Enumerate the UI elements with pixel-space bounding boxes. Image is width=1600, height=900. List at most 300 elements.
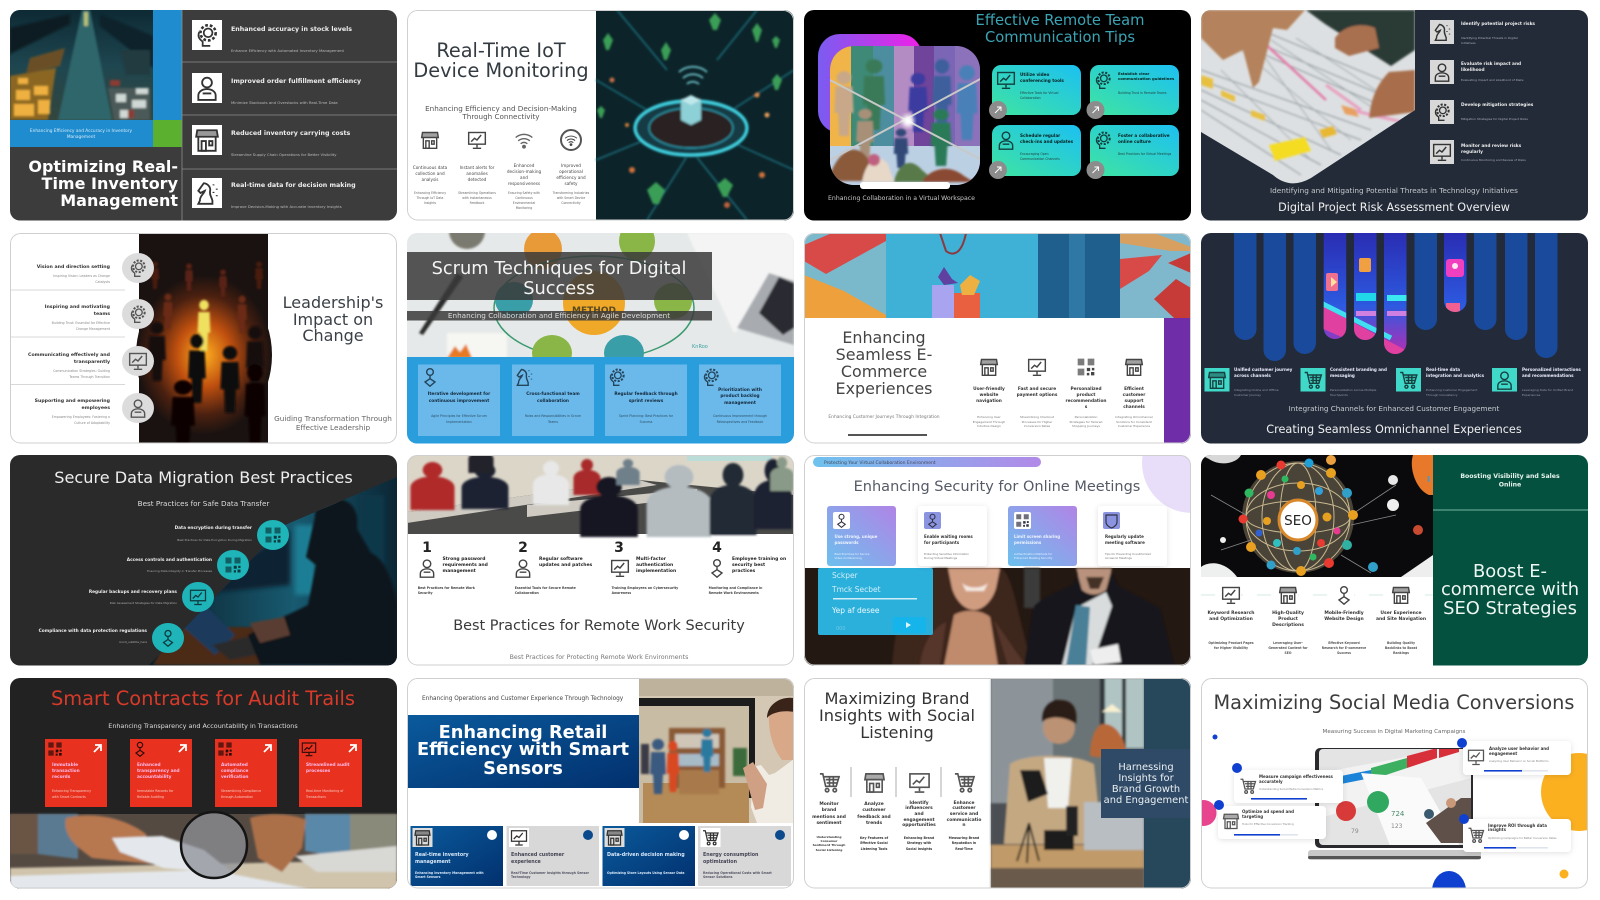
feature: support: Integrating Omnichannel — [1115, 415, 1153, 419]
panel: Maximizing Brand Insights with Social Listening — [804, 678, 1191, 889]
red card: audit: Transactions — [305, 795, 326, 799]
strategy: keywords: and Optimization — [1209, 616, 1253, 622]
title: Effective Remote Team — [976, 12, 1144, 29]
feature: support: customer — [1123, 392, 1146, 398]
metric card: ROI — [1459, 814, 1571, 852]
item: empowering: Supporting and empowering — [35, 398, 110, 404]
panel: Boost E-commerce with SEO Strategies — [1201, 453, 1588, 666]
caption: Enhancing Collaboration in a Virtual Workspace — [828, 195, 975, 202]
item: influencers: Identify — [909, 800, 929, 806]
subtitle: Through Connectivity — [461, 112, 540, 121]
tip: regular check-ins — [989, 125, 1081, 179]
feature: customer experience: Technology — [511, 875, 531, 879]
risk step: evaluate: Evaluate risk impact and — [1461, 61, 1521, 67]
metric card: ad spend: Tools for Effective Conversion Tracking — [1241, 822, 1294, 826]
callout box: Brand Growth — [1112, 784, 1180, 795]
item: analyze: trends — [866, 820, 882, 826]
feature: inventory: Smart Sensors — [415, 875, 441, 879]
strategy: mobile design: Research for E-commerce — [1322, 646, 1366, 650]
item: enhanced decision making — [507, 134, 541, 210]
metric card: user behavior — [1457, 738, 1571, 775]
item: operational safety: with Smart Device — [557, 196, 585, 200]
red card: compliance: Streamlining Compliance — [221, 789, 261, 793]
item: continuous data: Enhancing Efficiency — [414, 191, 446, 195]
feature: recommendations: product — [1077, 392, 1095, 398]
feature: support — [1115, 360, 1153, 428]
laptop with social metrics: 79 — [1351, 828, 1359, 835]
item: service: customer — [952, 805, 976, 811]
title: Real-Time IoT — [436, 39, 566, 62]
title: Communication Tips — [985, 29, 1135, 46]
red card: audit: Real-time Monitoring of — [306, 789, 344, 793]
metric card: user behavior: Analyze user behavior and — [1489, 746, 1549, 751]
benefit: stock accuracy — [192, 20, 352, 53]
feature: customer experience — [506, 826, 599, 886]
feature: customer experience: experience — [511, 859, 542, 865]
red card: audit: processes — [306, 768, 331, 774]
tip: screen sharing: permissions — [1014, 540, 1042, 545]
practice 1: requirements and — [442, 562, 488, 568]
feature: data-driven decisions: Optimizing Store Layouts Using Sensor Data — [607, 871, 684, 875]
item: instant alerts: Streamlining Operations — [458, 191, 496, 195]
tip: regular check-ins: Encouraging Open — [1020, 152, 1049, 156]
panel: Secure Data Migration Best Practices — [10, 455, 397, 666]
item: communicating — [28, 346, 154, 379]
practice 1: management — [442, 568, 477, 574]
strategy: descriptions: Descriptions — [1272, 622, 1304, 628]
metric card: campaign effectiveness: Measure campaign effectiveness — [1259, 774, 1334, 779]
item: vision: Inspiring Vision: Leaders as Change — [53, 274, 110, 278]
title: Scrum Techniques for Digital — [432, 258, 686, 279]
channel: unified journey: Unified customer journey — [1234, 367, 1293, 372]
channel: real-time data: integration and analytics — [1426, 373, 1485, 378]
metric card: campaign effectiveness — [1232, 763, 1343, 803]
tip: clear guidelines — [1086, 65, 1179, 119]
item: empowering: employees — [82, 405, 110, 411]
technique: iterative: Implementation — [446, 420, 472, 424]
feature: inventory: Real-time inventory — [415, 852, 469, 858]
strategy: keywords — [1207, 584, 1255, 650]
step: access controls — [127, 550, 249, 580]
channel: unified journey: Customer Journey — [1234, 393, 1261, 397]
strategy: navigation: User Experience — [1380, 610, 1422, 616]
title: Smart Contracts for Audit Trails — [51, 687, 355, 710]
item: analyze: Analyze — [864, 801, 884, 807]
title: Boost E- — [1473, 561, 1547, 582]
blue login panel: Yep af desee — [831, 606, 880, 615]
strategy: descriptions: High-Quality — [1272, 610, 1304, 616]
risk step: monitor: Monitor and review risks — [1461, 143, 1522, 149]
item: operational safety: Connectivity — [561, 201, 581, 205]
tag pill — [813, 457, 1041, 467]
metric card: ad spend: Optimize ad spend and — [1242, 809, 1294, 814]
red card: immutable records: Immutable — [52, 762, 78, 768]
item: motivating — [45, 299, 154, 331]
item: analyze — [857, 774, 891, 851]
photo: shopper with tablet in store — [639, 678, 794, 823]
photo: smiling business couple — [804, 568, 1191, 666]
item: motivating: teams — [94, 311, 110, 317]
red card: immutable records — [45, 739, 107, 807]
practice 3: Awareness — [612, 591, 631, 595]
practice 3: Training Employees on Cybersecurity — [612, 586, 679, 590]
feature: energy: Energy consumption — [703, 852, 759, 858]
channel: personalized interactions: Experiences — [1522, 393, 1541, 397]
item: empowering: Empowering Employees: Fostering a — [52, 415, 110, 419]
title: Impact on — [293, 310, 373, 329]
subtitle: Measuring Success in Digital Marketing Campaigns — [1323, 729, 1466, 735]
item: operational safety — [552, 130, 590, 205]
item: instant alerts: detected — [468, 177, 487, 182]
subtitle band: Enhancing Efficiency and Accuracy in Inventory — [30, 128, 133, 134]
panel: Creating Seamless Omnichannel Experiences — [1201, 213, 1588, 444]
item: operational safety: Improved — [561, 163, 581, 168]
item: enhanced decision making: decision-making — [507, 169, 541, 174]
item: monitor: Social Listening — [816, 848, 842, 852]
step: encryption: Data encryption during transfer — [175, 525, 253, 531]
strategy: mobile design: Effective Keyword — [1328, 641, 1360, 645]
metric card: ROI: Optimizing Campaigns for Better Conversion Rates — [1488, 836, 1557, 840]
item: monitor — [812, 774, 846, 852]
title — [819, 689, 975, 742]
photo: warehouse aisle — [10, 10, 153, 120]
item: enhanced decision making: Ensuring Safety with — [508, 191, 540, 195]
tip: video tools — [989, 65, 1081, 119]
strategy: descriptions: SEO — [1285, 651, 1292, 655]
item: service: Measuring Brand — [949, 836, 980, 840]
item: influencers: Strategy with — [907, 841, 932, 845]
item: influencers: Enhancing Brand — [904, 836, 935, 840]
item: analyze: Effective Social — [860, 841, 888, 845]
technique: feedback — [605, 364, 687, 436]
photo: hands on project plan — [1201, 10, 1415, 190]
title: Management — [60, 191, 178, 210]
tip: waiting rooms: for participants — [924, 540, 960, 545]
panel: Effective Remote Team Communication Tips — [804, 10, 1191, 220]
item: influencers: engagement — [903, 817, 935, 823]
subtitle: Identifying and Mitigating Potential Threats in Technology Initiatives — [1270, 186, 1518, 195]
strategy: descriptions: Product — [1278, 616, 1299, 622]
photo: scrum diagram on desk: METHOD — [572, 306, 616, 316]
tip: regular check-ins: Communication Channels — [1020, 157, 1060, 161]
channel: real-time data: Through Consistency — [1425, 393, 1458, 397]
callout box: Insights for — [1118, 773, 1175, 784]
feature: support: Customer Experience — [1118, 424, 1150, 428]
item: monitor: Monitor — [819, 801, 839, 807]
practice 1: 1 — [422, 540, 432, 556]
subtitle: Best Practices for Protecting Remote Work Environments — [510, 654, 688, 661]
item: analyze: Listening Tools — [861, 847, 888, 851]
blue login panel — [818, 568, 933, 635]
tip: video tools: Effective Tools for Virtual — [1020, 91, 1059, 95]
photo inside pills: neon phone apps — [1321, 228, 1471, 363]
photo: SEO network globe — [1201, 453, 1439, 577]
item: monitor: brand — [822, 807, 836, 813]
strategy: mobile design — [1322, 584, 1366, 655]
feature: recommendations — [1066, 359, 1106, 428]
channel: unified journey: across channels — [1234, 373, 1271, 378]
title: Experiences — [836, 379, 932, 398]
channel: personalized interactions: Personalized interactions — [1522, 367, 1581, 372]
feature: navigation — [973, 360, 1005, 428]
panel: Smart Contracts for Audit Trails — [10, 678, 397, 889]
red card: immutable records: Enhancing Transparency — [52, 789, 91, 793]
practice 2: updates and patches — [539, 562, 592, 568]
technique: cross-functional: Cross-functional team — [526, 391, 580, 397]
title: Commerce — [841, 362, 927, 381]
channel: consistent branding: messaging — [1330, 373, 1355, 378]
blue login panel: Sckper — [832, 571, 859, 580]
practice 4: 4 — [712, 540, 722, 556]
feature: navigation: Enhancing User — [977, 415, 1002, 419]
strategy: descriptions — [1268, 584, 1308, 655]
technique: feedback: Sprint Planning: Best Practices for — [619, 414, 674, 418]
feature: energy: Sensor Solutions — [703, 875, 733, 879]
subtitle: Enhancing Customer Journeys Through Integration — [828, 414, 940, 420]
subtitle: Effective Leadership — [296, 423, 370, 432]
feature: recommendations: Strategies for Tailored — [1070, 420, 1103, 424]
technique: feedback: sprint reviews — [629, 398, 664, 404]
step: compliance: icon4_subtitle_here — [119, 640, 147, 644]
item: communicating: Teams Through Transition — [68, 375, 110, 379]
title: Seamless E- — [836, 345, 932, 364]
photo: blue shopping bag and geometric shapes — [804, 233, 1191, 318]
title: commerce with — [1441, 579, 1579, 600]
strategy: keywords: Keyword Research — [1207, 610, 1255, 616]
benefit: real-time decisions: Real-time data for decision making — [231, 182, 356, 189]
benefit: real-time decisions — [192, 178, 356, 209]
practice 3: 3 — [614, 540, 624, 556]
tip: video tools: Utilize video — [1020, 72, 1049, 77]
item: vision: Vision and direction setting — [37, 264, 110, 270]
title: Insights with Social — [819, 706, 975, 725]
item: influencers: influencers — [905, 805, 933, 811]
feature: recommendations: Personalized — [1070, 386, 1102, 392]
feature: data-driven decisions: Data-driven decision making — [607, 852, 685, 858]
risk step: mitigate: Mitigation Strategies for Digital Project Risks — [1461, 117, 1528, 121]
strategy: navigation — [1376, 584, 1426, 655]
panel: Best Practices for Remote Work Security — [407, 443, 794, 666]
item: vision — [37, 253, 154, 284]
title: Device Monitoring — [413, 59, 589, 82]
metric card: user behavior: engagement — [1489, 751, 1517, 756]
risk step: mitigate: Develop mitigation strategies — [1461, 102, 1534, 108]
practice 1: Strong password — [442, 556, 486, 562]
item: service: service and — [950, 811, 978, 817]
feature: energy: Reducing Operational Costs with Smart — [703, 871, 772, 875]
photo: team collaborating — [830, 46, 982, 185]
tip: clear guidelines: Building Trust in Remote Teams — [1118, 91, 1167, 95]
laptop with social metrics: 724 — [1391, 810, 1405, 818]
feature: energy: optimization — [703, 859, 738, 865]
risk step: monitor — [1430, 140, 1526, 164]
title: Maximizing Social Media Conversions — [1214, 691, 1574, 714]
subtitle — [274, 414, 392, 432]
risk step: identify: Identifying Potential Threats in Digital — [1461, 36, 1518, 40]
item: enhanced decision making: responsiveness — [508, 181, 540, 186]
red card: compliance: verification — [221, 774, 248, 780]
practice 4: Remote Work Environments — [709, 591, 759, 595]
title: Leadership's — [283, 293, 383, 312]
technique: feedback: Regular feedback through — [614, 391, 678, 397]
subtitle: Enhancing Efficiency and Decision-Making — [425, 104, 577, 113]
tip: clear guidelines: communication guidelines — [1118, 76, 1175, 81]
item: continuous data — [413, 132, 448, 205]
tip: unique passwords: Use strong, unique — [834, 534, 878, 539]
item: empowering: Culture of Adaptability — [74, 421, 110, 425]
feature: payment: Fast and secure — [1018, 386, 1056, 392]
strategy: navigation: and Site Navigation — [1376, 616, 1426, 622]
item: monitor: mentions and — [812, 814, 846, 820]
title: SEO Strategies — [1443, 598, 1577, 619]
red card: transparency: Immutable Records for — [137, 789, 174, 793]
panel: Enhancing Retail Efficiency with Smart Sensors — [407, 678, 794, 888]
item: communicating: Communication Strategies: Guiding — [53, 369, 110, 373]
feature: support: channels — [1123, 404, 1145, 410]
backplate: purple gradient — [818, 34, 922, 133]
tip: clear guidelines: Establish clear — [1118, 71, 1150, 76]
feature: recommendations: Shopping Journeys — [1072, 424, 1100, 428]
tip: screen sharing — [1008, 506, 1077, 566]
title: Enhancing — [842, 328, 926, 347]
benefit: stock accuracy: Enhanced accuracy in stock levels — [231, 26, 352, 33]
practice 2: Collaboration — [515, 591, 540, 595]
red card: immutable records: with Smart Contracts — [52, 795, 86, 799]
item: continuous data: Continuous data — [413, 165, 448, 170]
practice 1 — [418, 540, 488, 595]
red card: transparency: Reliable Auditing — [137, 795, 164, 799]
risk step: evaluate: Evaluating Impact and Likelihood of Risks — [1461, 78, 1524, 82]
practice 2: 2 — [518, 540, 528, 556]
risk step: evaluate — [1430, 60, 1524, 84]
red card: compliance: compliance — [221, 768, 249, 774]
technique: prioritization: Prioritization with — [718, 387, 762, 393]
title — [28, 157, 179, 210]
item: enhanced decision making: Continuous — [515, 196, 533, 200]
title — [415, 42, 587, 81]
tip: unique passwords: Best Practices for Secure — [834, 552, 870, 556]
channel: consistent branding: Touchpoints — [1329, 393, 1348, 397]
tip: waiting rooms: During Virtual Meetings — [924, 556, 958, 560]
item: operational safety: safety — [565, 181, 578, 186]
metric card: ad spend — [1214, 800, 1326, 839]
technique: cross-functional: Roles and Responsibilities in Scrum — [525, 414, 581, 418]
practice 1: Security — [418, 591, 434, 595]
tip: unique passwords: passwords — [834, 540, 859, 545]
tip: update software: Regularly update — [1105, 534, 1144, 539]
title: Secure Data Migration Best Practices — [54, 468, 353, 487]
risk step: evaluate: likelihood — [1461, 67, 1485, 73]
red card: transparency: accountability — [137, 774, 172, 780]
technique: prioritization: Continuous Improvement through — [713, 414, 767, 418]
feature: payment: Conversion Rates — [1024, 424, 1051, 428]
red card: transparency — [130, 739, 192, 807]
practice 2: Regular software — [539, 556, 583, 562]
item: enhanced decision making: and — [520, 175, 528, 180]
decorative circle — [1142, 413, 1242, 513]
item: instant alerts: Feedback — [470, 201, 485, 205]
photo: SEO network globe: SEO — [1284, 513, 1312, 529]
benefit: order fulfillment: Minimize Stockouts and Overstocks with Real-Time Data — [231, 100, 338, 105]
subtitle — [426, 106, 576, 120]
feature: navigation: Intuitive Design — [977, 424, 1001, 428]
technique: prioritization: management — [724, 400, 756, 406]
metric card: ad spend: targeting — [1242, 814, 1263, 819]
item: influencers — [902, 774, 936, 851]
subtitle: Integrating Channels for Enhanced Customer Engagement — [1289, 404, 1499, 413]
tip: collaborative culture — [1086, 125, 1179, 179]
feature: recommendations: recommendation — [1066, 398, 1106, 404]
tip: waiting rooms — [918, 506, 987, 566]
laptop with social metrics: 123 — [1391, 823, 1403, 830]
red card: audit: Streamlined audit — [306, 762, 350, 768]
title — [976, 12, 1144, 46]
panel: Enhancing Security for Online Meetings — [804, 413, 1242, 666]
feature: navigation: website — [980, 392, 999, 398]
panel: Enhancing Seamless E-Commerce Experiences — [804, 233, 1191, 444]
item: influencers: opportunities — [902, 822, 936, 828]
tip: update software — [1098, 506, 1167, 566]
feature: navigation: Engagement Through — [973, 420, 1005, 424]
step: backups: Regular backups and recovery plans — [89, 589, 177, 595]
subtitle: Enhancing Transparency and Accountability in Transactions — [108, 722, 298, 730]
feature: payment: payment options — [1017, 392, 1058, 398]
technique: iterative: continuous improvement — [429, 398, 489, 404]
step: access controls: Access controls and authentication — [127, 557, 212, 563]
tip: screen sharing: Enhanced Meeting Security — [1014, 556, 1053, 560]
strategy: navigation: Rankings — [1393, 651, 1409, 655]
channel: consistent branding — [1300, 367, 1387, 397]
item: service — [947, 774, 981, 851]
benefit: real-time decisions: Improve Decision-Making with Accurate Inventory Insights — [231, 204, 342, 209]
photo: classroom training — [407, 443, 794, 537]
item: motivating: Building Trust: Essential for Effective — [52, 321, 110, 325]
blue section — [407, 357, 794, 444]
title: Best Practices for Remote Work Security — [453, 618, 745, 634]
benefit: carrying costs — [192, 125, 351, 157]
item: instant alerts: anomalies — [466, 171, 488, 176]
title — [283, 293, 383, 345]
panel: Scrum Techniques for Digital Success — [407, 213, 794, 444]
item: motivating: Change Management — [76, 327, 111, 331]
item: instant alerts: with Instantaneous — [462, 196, 492, 200]
tip: video tools: conferencing tools — [1020, 78, 1064, 83]
title: Digital Project Risk Assessment Overview — [1278, 201, 1510, 214]
feature: recommendations: Personalization — [1075, 415, 1097, 419]
feature: navigation: navigation — [976, 398, 1002, 404]
tip: unique passwords — [827, 506, 896, 566]
subtitle — [1460, 473, 1560, 488]
technique: prioritization: Retrospectives and Feedback — [717, 420, 764, 424]
panel: Leadership's Impact on Change — [10, 233, 397, 451]
red card: compliance: through Automation — [221, 795, 253, 799]
purple side bar — [1164, 318, 1191, 444]
feature: payment: Streamlining Checkout — [1020, 415, 1055, 419]
item: analyze: feedback and — [857, 814, 891, 820]
item: operational safety: operational — [559, 169, 583, 174]
tip: collaborative culture: online culture — [1118, 139, 1151, 144]
title banner: Enhancing Retail — [439, 722, 607, 743]
item: service: n — [962, 823, 966, 828]
title — [1441, 561, 1579, 619]
item: influencers: and — [914, 811, 924, 817]
panel: Maximizing Social Media Conversions — [1190, 678, 1600, 900]
subtitle: Guiding Transformation Through — [274, 414, 392, 423]
item: communicating: transparently — [74, 359, 110, 365]
item: continuous data: collection and — [415, 171, 445, 176]
feature: support: support — [1125, 398, 1143, 404]
feature: support: Efficient — [1124, 386, 1144, 392]
